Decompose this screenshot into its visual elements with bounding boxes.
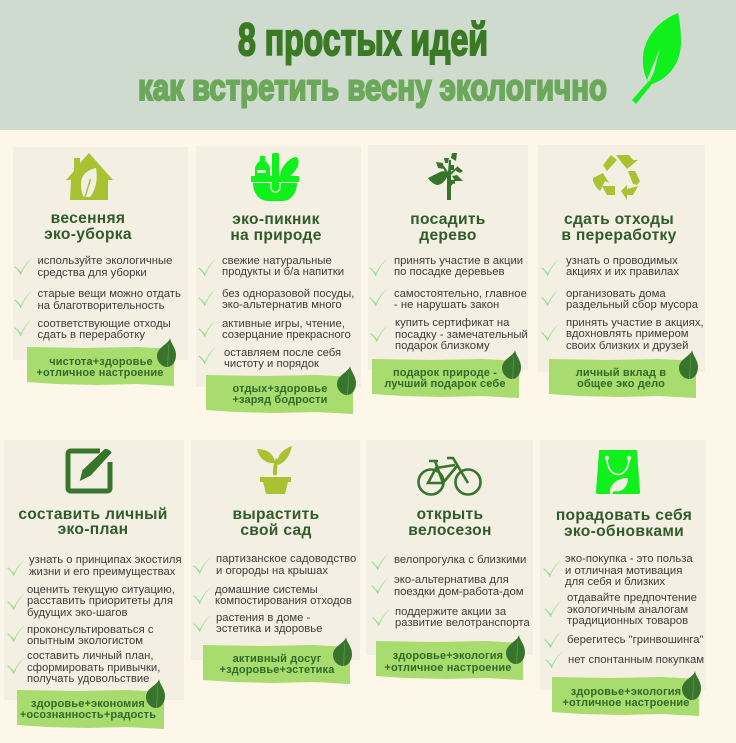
checklist: самостоятельно, главное	[394, 288, 527, 300]
checklist: принять участие в акции	[394, 255, 523, 267]
checklist	[14, 255, 181, 341]
banner: +заряд бодрости	[232, 394, 328, 406]
icon: picnic basket	[251, 153, 299, 201]
checklist: старые вещи можно отдать	[38, 288, 181, 300]
banner	[372, 350, 521, 398]
panel: вырастить свой сад	[191, 440, 360, 684]
heading: эко-обновками	[564, 523, 684, 540]
banner	[376, 635, 525, 680]
heading	[408, 506, 492, 539]
heading	[18, 506, 168, 538]
title: 8 простых идей	[238, 14, 488, 65]
header band	[0, 0, 736, 130]
checklist: своих близких и друзей	[566, 340, 688, 352]
heading: в переработку	[561, 227, 677, 244]
banner	[27, 338, 176, 386]
checklist: по посадке деревьев	[394, 266, 505, 278]
heading	[233, 506, 319, 539]
banner: здоровье+экология	[393, 650, 503, 662]
heading: на природе	[230, 227, 322, 244]
checklist: растения в доме -	[216, 612, 311, 624]
checklist	[198, 255, 354, 370]
checklist: развитие велотранспорта	[395, 617, 530, 629]
checklist: оставляем после себя	[224, 347, 341, 359]
checklist: сдать в переработку	[38, 329, 145, 341]
checklist: жизни и его преимуществах	[29, 566, 176, 578]
checklist: опытным экологистом	[27, 635, 143, 647]
icon: tree	[428, 153, 463, 200]
checklist: нет спонтанным покупкам	[568, 654, 704, 666]
heading: открыть	[417, 506, 483, 523]
checklist	[193, 553, 356, 635]
checklist: компостирования отходов	[215, 595, 352, 607]
heading: эко-уборка	[44, 226, 132, 243]
banner: личный вклад в	[576, 367, 666, 379]
checklist: подарок близкому	[395, 340, 490, 352]
banner: здоровье+экономия	[31, 698, 145, 710]
checklist: вдохновлять примером	[566, 328, 689, 340]
icon: note with pencil	[68, 448, 112, 491]
checklist: составить личный план,	[27, 650, 154, 662]
heading: порадовать себя	[556, 507, 692, 524]
checklist: расставить приоритеты для	[27, 595, 173, 607]
checklist: поездки дом-работа-дом	[394, 586, 524, 598]
checklist: отдавайте предпочтение	[567, 592, 697, 604]
heading: составить личный	[18, 506, 168, 523]
heading: вырастить	[233, 506, 319, 523]
icon: house with leaf	[66, 153, 113, 200]
checklist: домашние системы	[215, 584, 318, 596]
banner: здоровье+экология	[571, 686, 681, 698]
checklist: на благотворительность	[38, 300, 165, 312]
panel: посадить дерево	[368, 145, 528, 398]
heading: велосезон	[408, 522, 492, 539]
checklist: эко-покупка - это польза	[565, 553, 693, 565]
banner: чистота+здоровье	[49, 356, 153, 368]
heading: свой сад	[240, 522, 312, 539]
checklist: партизанское садоводство	[216, 553, 356, 565]
checklist: экологичным аналогам	[567, 604, 688, 616]
checklist	[369, 255, 528, 352]
icon: potted sprout	[257, 446, 292, 494]
checklist: посадку - замечательный	[395, 329, 528, 341]
checklist: берегитесь "гринвошинга"	[567, 634, 704, 646]
banner: общее эко дело	[577, 378, 665, 390]
banner	[552, 671, 701, 716]
checklist: созерцание прекрасного	[222, 329, 351, 341]
banner: +отличное настроение	[384, 662, 512, 674]
checklist: - не нарушать закон	[394, 299, 499, 311]
checklist: оценить текущую ситуацию,	[27, 584, 175, 596]
banner	[17, 679, 165, 729]
panel: весенняя эко-уборка	[13, 147, 188, 386]
heading: посадить	[410, 211, 486, 228]
checklist	[543, 553, 704, 668]
icon: big leaf	[632, 13, 681, 104]
checklist	[7, 554, 182, 685]
checklist: раздельный сбор мусора	[566, 299, 699, 311]
banner: +отличное настроение	[562, 697, 690, 709]
heading: сдать отходы	[564, 211, 674, 228]
panel: открыть велосезон	[366, 440, 533, 680]
icon: recycle arrows	[593, 155, 640, 200]
heading	[561, 211, 677, 244]
checklist	[371, 553, 530, 629]
checklist	[541, 255, 704, 352]
banner: активный досуг	[233, 653, 322, 665]
subtitle: как встретить весну экологично	[138, 67, 607, 108]
checklist: организовать дома	[566, 288, 666, 300]
panel: эко-пикник на природе	[196, 146, 361, 414]
checklist: эко-альтернатива для	[394, 574, 509, 586]
checklist: акциях и их правилах	[566, 266, 679, 278]
banner: +осознанность+радость	[20, 709, 156, 721]
heading	[556, 507, 692, 540]
checklist: проконсультироваться с	[27, 624, 154, 636]
banner: +здоровье+эстетика	[220, 664, 335, 676]
checklist: свежие натуральные	[222, 255, 332, 267]
checklist: используйте экологичные	[38, 255, 172, 267]
checklist: будущих эко-шагов	[27, 607, 128, 619]
checklist: без одноразовой посуды,	[222, 288, 354, 300]
checklist: узнать о проводимых	[566, 255, 678, 267]
checklist: соответствующие отходы	[38, 318, 171, 330]
banner: +отличное настроение	[36, 367, 164, 379]
banner: лучший подарок себе	[384, 378, 506, 390]
banner	[203, 637, 352, 684]
checklist: чистоту и порядок	[224, 358, 319, 370]
panel: составить личный эко-план	[4, 440, 184, 729]
banner: отдых+здоровье	[233, 383, 327, 395]
checklist: сформировать привычки,	[27, 662, 160, 674]
checklist: эстетика и здоровье	[216, 623, 322, 635]
checklist: поддержите акции за	[395, 606, 507, 618]
heading: дерево	[419, 227, 477, 244]
panel: сдать отходы в переработку	[538, 145, 705, 398]
heading	[44, 210, 132, 243]
banner	[206, 366, 356, 414]
icon: shopping bag	[596, 450, 640, 494]
checklist: средства для уборки	[38, 267, 147, 279]
heading: весенняя	[51, 210, 125, 227]
checklist: продукты и б/а напитки	[222, 266, 344, 278]
checklist: купить сертификат на	[395, 317, 510, 329]
heading: эко-план	[58, 521, 128, 538]
panel: порадовать себя эко-обновками	[540, 440, 706, 716]
heading	[230, 211, 322, 244]
checklist: для себя и близких	[565, 576, 665, 588]
checklist: традиционных товаров	[567, 615, 688, 627]
checklist: принять участие в акциях,	[566, 317, 704, 329]
checklist: и огороды на крышах	[216, 565, 328, 577]
checklist: эко-альтернатив много	[222, 299, 342, 311]
checklist: активные игры, чтение,	[222, 318, 345, 330]
heading	[410, 211, 486, 244]
checklist: получать удовольствие	[27, 673, 149, 685]
icon: bicycle	[418, 458, 480, 494]
banner	[549, 350, 698, 398]
banner: подарок природе -	[393, 367, 497, 379]
checklist: и отличная мотивация	[565, 565, 682, 577]
checklist: велопрогулка с близкими	[394, 554, 526, 566]
checklist: узнать о принципах экостиля	[29, 554, 182, 566]
heading: эко-пикник	[232, 211, 320, 228]
